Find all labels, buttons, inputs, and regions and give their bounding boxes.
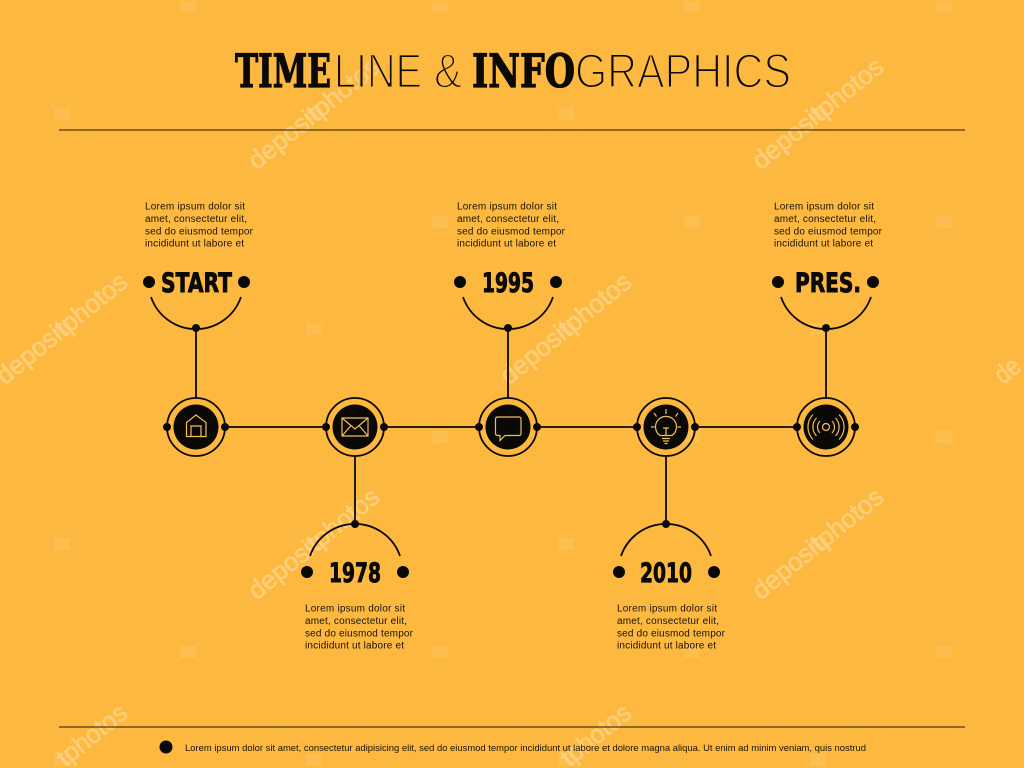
- text: 2010: amet, consectetur elit,: [617, 616, 719, 627]
- label: 1978: 1978: [329, 558, 381, 589]
- text: 1978: [305, 604, 414, 652]
- label: 1978: [301, 520, 409, 589]
- text: present: amet, consectetur elit,: [774, 214, 876, 225]
- text: start: amet, consectetur elit,: [145, 214, 247, 225]
- text: start: incididunt ut labore et: [145, 238, 244, 250]
- text: present: Lorem ipsum dolor sit: [774, 202, 874, 212]
- text: 1978: Lorem ipsum dolor sit: [305, 604, 405, 614]
- watermarks: depositphotos: [746, 481, 889, 605]
- text: 1978: incididunt ut labore et: [305, 640, 404, 652]
- title: TIME: [235, 44, 331, 98]
- watermarks: depositphotos: [242, 481, 385, 605]
- text: 1995: sed do eiusmod tempor: [457, 226, 566, 238]
- node: speech bubble icon: [475, 398, 541, 456]
- label: present: [772, 268, 879, 332]
- footer note: Lorem ipsum dolor sit amet, consectetur adipisicing elit, sed do eiusmod tempor incididunt ut labore et dolore magna aliqua. Ut enim ad minim veniam, quis nostrud: [185, 743, 866, 754]
- title: [235, 44, 791, 98]
- title: LINE: [334, 46, 422, 98]
- label: 1995: 1995: [482, 268, 534, 299]
- text: present: incididunt ut labore et: [774, 238, 873, 250]
- timeline connector: [196, 328, 826, 524]
- watermarks: depositphotos: [746, 51, 889, 175]
- text: 1978: amet, consectetur elit,: [305, 616, 407, 627]
- text: start: Lorem ipsum dolor sit: [145, 202, 245, 212]
- text: 1995: Lorem ipsum dolor sit: [457, 202, 557, 212]
- text: present: [774, 202, 883, 250]
- label: start: START: [161, 268, 232, 299]
- text: 1995: [457, 202, 566, 250]
- text: 2010: sed do eiusmod tempor: [617, 628, 726, 640]
- text: 1995: amet, consectetur elit,: [457, 214, 559, 225]
- text: present: sed do eiusmod tempor: [774, 226, 883, 238]
- label: start: [143, 268, 250, 332]
- node: broadcast signal icon: [793, 398, 859, 456]
- label: 2010: [613, 520, 720, 589]
- text: 2010: Lorem ipsum dolor sit: [617, 604, 717, 614]
- text: 1995: incididunt ut labore et: [457, 238, 556, 250]
- label: 2010: 2010: [640, 558, 692, 589]
- watermarks: depositphotos: [242, 51, 385, 175]
- text: 2010: incididunt ut labore et: [617, 640, 716, 652]
- node: envelope icon: [322, 398, 388, 456]
- text: start: sed do eiusmod tempor: [145, 226, 254, 238]
- label: present: PRES.: [795, 268, 861, 299]
- text: start: [145, 202, 254, 250]
- watermarks: depositphotos: [494, 266, 637, 390]
- text: 1978: sed do eiusmod tempor: [305, 628, 414, 640]
- title: GRAPHICS: [575, 46, 791, 98]
- node: home icon: [163, 398, 229, 456]
- label: 1995: [454, 268, 562, 332]
- node: light bulb icon: [633, 398, 699, 456]
- title: &: [434, 46, 462, 98]
- title: INFO: [472, 44, 575, 98]
- text: 2010: [617, 604, 726, 652]
